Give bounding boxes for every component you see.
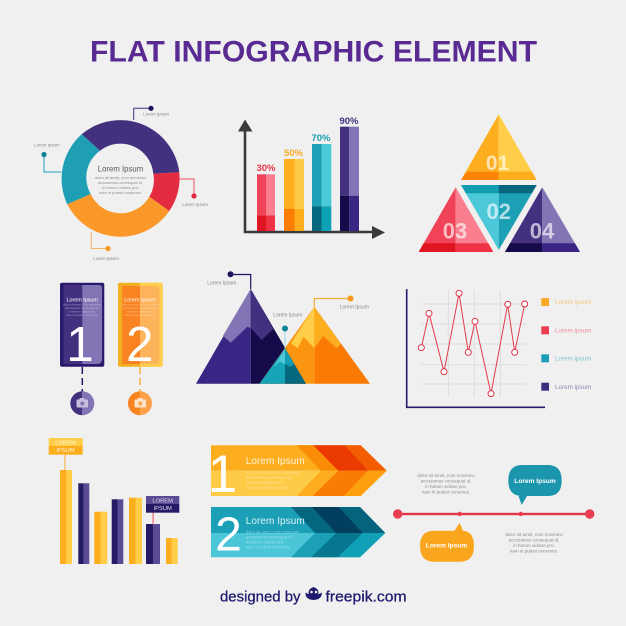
donut segment: red xyxy=(149,172,180,211)
triangle 04: 04 xyxy=(530,218,555,243)
footer credit: designed by xyxy=(220,588,301,606)
connector 2 xyxy=(139,367,141,392)
triangle 02 xyxy=(461,185,537,250)
callout: yellow label: IPSUM xyxy=(56,448,75,454)
card 2: dolor sit amet, cum nominavi xyxy=(121,302,159,306)
axes with arrows xyxy=(238,120,385,239)
banner body xyxy=(246,470,299,490)
text block: upper left: nam in putent nonumes. xyxy=(422,490,470,494)
legend: Lorem ipsum xyxy=(555,299,591,306)
card 1: in harum vidisse pro, xyxy=(68,310,96,314)
triangle 03: 03 xyxy=(443,218,467,243)
marker: orange peak: Lorem Ipsum xyxy=(340,304,369,310)
triangle 03 xyxy=(419,187,493,252)
timeline axis xyxy=(393,509,594,519)
speech bubble: teal: Lorem Ipsum xyxy=(514,478,556,485)
donut chart panel xyxy=(34,106,208,261)
donut segment: orange xyxy=(67,194,169,237)
columns xyxy=(60,470,178,564)
bar: 50%: 50% xyxy=(284,148,304,159)
number 2: 2 xyxy=(215,509,242,562)
card 2: accusamus consequat id, xyxy=(123,306,157,310)
callout: teal xyxy=(34,142,62,172)
card 1: 1 xyxy=(66,318,94,372)
text block: upper left: dolor sit amet, cum nominavi xyxy=(417,473,475,478)
banner body: nam in putent nonumes. xyxy=(246,544,291,550)
bar: 70%: 70% xyxy=(311,133,331,144)
donut segment: teal xyxy=(62,134,100,204)
column chart xyxy=(49,438,179,564)
callout: orange xyxy=(91,232,119,261)
card 2: Lorem Ipsum xyxy=(124,298,156,304)
card 1 xyxy=(60,283,104,372)
mountains chart xyxy=(196,271,370,384)
bar: 90%: 90% xyxy=(339,116,359,127)
card 1: accusamus consequat id, xyxy=(65,306,99,310)
banner body: in harum vidisse pro, xyxy=(246,480,284,485)
text block: upper left: in harum vidisse pro, xyxy=(425,484,467,489)
callout: navy label: LOREM xyxy=(152,498,173,504)
donut centre text xyxy=(95,164,146,195)
callout: navy label xyxy=(146,496,179,524)
mountain: orange xyxy=(260,307,370,384)
callout: yellow label xyxy=(49,438,83,470)
marker: navy peak xyxy=(207,271,251,289)
mountain: navy xyxy=(196,289,306,384)
donut centre text: Lorem Ipsum xyxy=(98,164,143,174)
card 2 xyxy=(118,283,163,372)
icon: camera circle 1 xyxy=(70,391,94,415)
bar: 50% xyxy=(284,148,304,231)
donut centre text: in harum vidisse pro, xyxy=(102,185,139,190)
callout: red xyxy=(180,179,208,207)
icon: freepik logo xyxy=(305,587,322,600)
bar: 70% xyxy=(311,133,331,231)
banner heading: Lorem Ipsum xyxy=(246,516,305,527)
bar chart: percentages xyxy=(238,116,385,239)
text block: lower right: dolor sit amet, cum nominavi xyxy=(505,532,563,537)
callout: orange: Lorem Ipsum xyxy=(93,256,119,261)
banner body: accusamus consequat id xyxy=(246,534,292,540)
speech bubble: orange: Lorem Ipsum xyxy=(426,542,467,550)
banner body xyxy=(246,530,299,550)
callout: navy: Lorem Ipsum xyxy=(143,112,169,116)
speech bubble: orange xyxy=(420,523,474,562)
connector 1 xyxy=(81,367,83,392)
marker: navy peak: Lorem Ipsum xyxy=(207,280,236,286)
card 1: nam in putent nonumes. xyxy=(66,313,98,317)
numbered cards xyxy=(60,283,163,415)
donut centre text: nam in putent nonumes. xyxy=(99,190,142,195)
triangle 01: 01 xyxy=(486,152,509,175)
marker: orange peak xyxy=(314,296,369,310)
banner heading: Lorem Ipsum xyxy=(246,456,305,467)
footer credit: freepik.com xyxy=(326,588,406,606)
bar: 90% xyxy=(339,116,359,231)
card 1: dolor sit amet, cum nominavi xyxy=(63,302,101,306)
card 2: nam in putent nonumes. xyxy=(124,313,156,317)
callout: navy xyxy=(134,106,169,120)
text block: upper left xyxy=(417,473,475,494)
speech bubble: teal xyxy=(508,465,562,505)
callout: yellow label: LOREM xyxy=(55,440,76,446)
banner body: accusamus consequat id xyxy=(246,475,292,480)
banner body: nam in putent nonumes. xyxy=(246,485,291,490)
donut centre text: dolor sit amet, cum nominavi xyxy=(95,175,146,180)
footer credit xyxy=(220,587,406,606)
mountain: teal xyxy=(260,348,306,384)
marker: teal peak: Lorem Ipsum xyxy=(273,312,302,318)
card 2: 2 xyxy=(126,318,153,372)
axes xyxy=(407,289,545,407)
card 2: in harum vidisse pro, xyxy=(126,310,154,314)
banner body: dolor sit amet, cum nominavi xyxy=(246,470,299,475)
donut segment: navy xyxy=(82,120,179,174)
number 1: 1 xyxy=(208,445,237,504)
text block: lower right xyxy=(505,532,563,554)
legend: Lorem ipsum xyxy=(555,384,591,391)
arrow banner 1 xyxy=(208,445,387,504)
callout: teal: Lorem Ipsum xyxy=(34,142,60,147)
callout: red: Lorem Ipsum xyxy=(182,202,208,207)
timeline xyxy=(393,465,594,562)
card 1: Lorem Ipsum xyxy=(66,298,98,304)
bar: 30%: 30% xyxy=(256,163,276,174)
callout: navy label: IPSUM xyxy=(154,506,172,512)
text block: lower right: accusamus consequat id, xyxy=(509,538,559,542)
data line xyxy=(418,290,528,397)
arrow banner 2 xyxy=(211,507,385,562)
line chart xyxy=(407,289,591,407)
triangle pyramid xyxy=(419,114,580,252)
text block: lower right: in harum vidisse pro, xyxy=(513,543,555,548)
banner body: in harum vidisse pro, xyxy=(246,540,284,544)
text block: upper left: accusamus consequat id, xyxy=(421,478,471,484)
marker: teal peak xyxy=(273,312,302,348)
donut centre text: accusamus consequat id, xyxy=(98,180,143,185)
legend: Lorem ipsum xyxy=(555,356,591,362)
bar: 30% xyxy=(256,163,276,231)
text block: lower right: nam in putent nonumes. xyxy=(510,548,558,554)
triangle 02: 02 xyxy=(486,199,511,224)
title: FLAT INFOGRAPHIC ELEMENT xyxy=(90,35,537,68)
icon: camera circle 2 xyxy=(128,391,152,415)
banner body: dolor sit amet, cum nominavi xyxy=(246,530,299,534)
legend: Lorem ipsum xyxy=(555,328,591,334)
legend xyxy=(541,298,591,391)
triangle 01 xyxy=(461,114,537,180)
triangle 04 xyxy=(505,187,580,252)
